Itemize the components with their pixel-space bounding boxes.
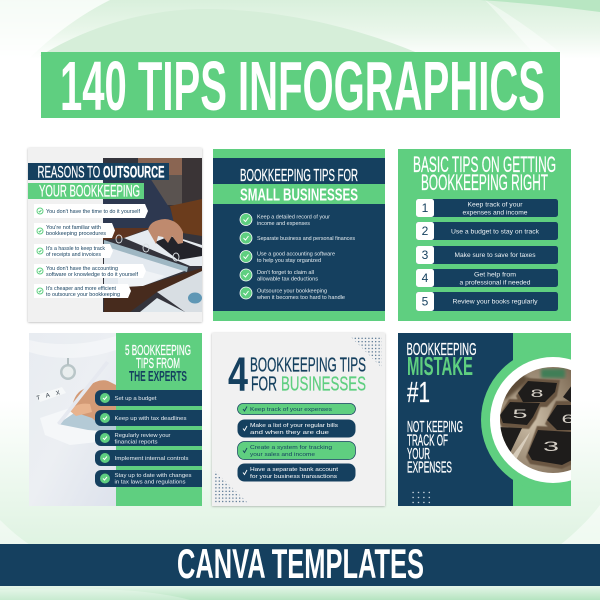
numbered rows: 3	[422, 248, 429, 262]
heading: your bookkeeping: YOUR BOOKKEEPING	[39, 182, 140, 200]
photo: hand writing on tax paper	[29, 336, 118, 445]
circle photo: calculator keys: 8	[530, 388, 544, 400]
numbered rows: Keep track of your	[468, 202, 522, 208]
heading: SMALL BUSINESSES	[240, 184, 358, 204]
tips list: when it becomes too hard to handle	[256, 295, 345, 301]
mistake description: NOT KEEPING	[407, 419, 463, 436]
numbered rows: 1	[422, 201, 429, 215]
panel: expert tips	[29, 333, 202, 506]
tips pills: your sales and income	[250, 452, 316, 458]
tips list: Don't forget to claim all	[257, 270, 314, 276]
mistake description	[407, 419, 463, 476]
footer banner	[0, 540, 600, 587]
tips pills: Create a system for tracking	[250, 445, 332, 451]
heading: BUSINESSES	[281, 374, 366, 396]
numbered rows: Get help from	[474, 272, 516, 278]
tips pills	[238, 404, 356, 482]
heading	[413, 152, 556, 195]
title banner	[41, 47, 560, 125]
numbered rows: Make sure to save for taxes	[454, 252, 536, 259]
reason list: software or knowledge to do it yourself	[46, 272, 139, 278]
circle photo: calculator keys: 6	[562, 412, 575, 426]
panel: four tips	[212, 333, 385, 506]
reason list: bookkeeping procedures	[46, 231, 106, 237]
reason list: You don't have the accounting	[46, 266, 118, 272]
heading: FOR	[251, 374, 277, 396]
reason list: to outsource your bookkeeping	[46, 292, 120, 298]
reason list: You're not familiar with	[46, 225, 101, 231]
tips rows: in tax laws and regulations	[114, 480, 186, 486]
tips list: Separate business and personal finances	[257, 236, 355, 242]
reason list: You don't have the time to do it yourself	[46, 209, 141, 215]
tips list: to help you stay organized	[257, 258, 321, 264]
reason list: It's cheaper and more efficient	[46, 286, 117, 292]
heading	[406, 339, 476, 409]
dot pattern bottom left	[215, 471, 248, 503]
reason list: of receipts and invoices	[46, 252, 101, 258]
heading: #1	[407, 377, 430, 409]
heading: reasons to outsource: REASONS TO OUTSOURCE	[38, 162, 164, 182]
tips list: income and expenses	[257, 221, 310, 227]
tips rows: Implement internal controls	[114, 456, 189, 462]
numbered rows	[416, 199, 558, 311]
heading	[228, 349, 366, 402]
numbered rows: a professional if needed	[460, 280, 531, 286]
mistake description: YOUR	[407, 446, 430, 463]
tips rows: financial reports	[114, 440, 158, 446]
dot pattern top right	[350, 336, 382, 368]
numbered rows: Use a budget to stay on track	[451, 228, 540, 236]
circle photo: calculator keys: 5	[512, 407, 528, 421]
circle photo: calculator keys	[481, 357, 571, 483]
tips list: Outsource your bookkeeping	[257, 288, 327, 294]
tips list: allowable tax deductions	[257, 276, 318, 282]
heading: 5 BOOKKEEPING	[125, 342, 191, 359]
reason list: It's a hassle to keep track	[46, 246, 105, 252]
heading: BOOKKEEPING	[406, 339, 476, 359]
tips pills: Make a list of your regular bills	[250, 423, 338, 429]
tips list	[256, 214, 355, 301]
mistake description: EXPENSES	[407, 460, 452, 476]
heading: MISTAKE	[407, 351, 473, 381]
tips rows	[95, 390, 202, 487]
tips rows: Keep up with tax deadlines	[114, 416, 187, 422]
tips pills: Have a separate bank account	[250, 467, 338, 473]
dot pattern	[410, 490, 431, 505]
heading	[240, 165, 358, 204]
tips pills: Keep track of your expenses	[250, 407, 332, 413]
numbered rows: 5	[422, 294, 429, 308]
panel: reasons to outsource	[28, 148, 202, 322]
heading: BOOKKEEPING TIPS	[250, 354, 366, 376]
heading: your bookkeeping	[28, 182, 144, 200]
numbered rows: 2	[422, 224, 429, 238]
tips rows: Stay up to date with changes	[114, 473, 192, 479]
tips rows: Regularly review your	[114, 433, 171, 439]
panel: small business tips	[213, 149, 385, 321]
tips list: Keep a detailed record of your	[257, 214, 330, 220]
heading	[125, 342, 191, 385]
footer text: CANVA TEMPLATES	[177, 540, 424, 587]
heading: THE EXPERTS	[129, 368, 187, 385]
tips rows: Set up a budget	[114, 396, 157, 402]
tips pills: and when they are due	[250, 430, 330, 436]
heading: BOOKKEEPING TIPS FOR	[240, 165, 358, 185]
numbered rows: expenses and income	[462, 210, 528, 216]
tips pills: for your business transactions	[250, 474, 337, 480]
heading: 4	[228, 349, 248, 402]
reason list	[34, 204, 148, 298]
photo: hand writing on tax paper: TAX	[36, 390, 61, 402]
heading: TIPS FROM	[136, 355, 180, 372]
tips list: Use a good accounting software	[257, 252, 335, 258]
check icons	[240, 214, 252, 299]
photo: hands on calculator and binder	[103, 158, 202, 312]
panel: bookkeeping mistake	[398, 333, 571, 506]
numbered rows: Review your books regularly	[452, 298, 538, 306]
mistake description: TRACK OF	[407, 432, 448, 450]
circle photo: calculator keys: 3	[543, 438, 559, 454]
numbered rows: 4	[422, 271, 429, 285]
panel: basic tips	[398, 149, 571, 321]
